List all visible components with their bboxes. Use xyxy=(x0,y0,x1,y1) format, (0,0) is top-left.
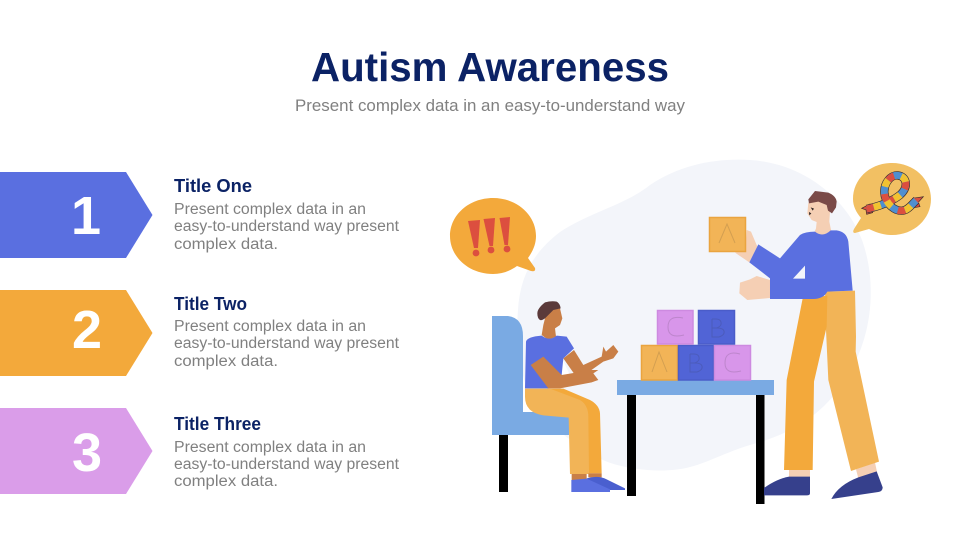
adult hair xyxy=(808,191,837,213)
adult hands xyxy=(735,230,770,300)
arrow: number two banner xyxy=(0,290,152,376)
number two: 2 xyxy=(72,300,102,360)
heading: title three: Title Three xyxy=(174,414,261,434)
panel: item one xyxy=(0,172,400,258)
gap between child's arms xyxy=(562,358,571,377)
background blob xyxy=(517,160,871,471)
child neck and face xyxy=(542,308,562,340)
speech bubble: exclamation marks xyxy=(450,198,536,274)
adult back leg xyxy=(825,291,879,471)
child shoes xyxy=(587,477,625,490)
text block: item two description: Present complex data in an xyxy=(174,318,366,335)
text block: item one description xyxy=(174,201,400,253)
adult arm gap xyxy=(793,266,805,279)
heading: title two: Title Two xyxy=(174,294,247,314)
adult shoes xyxy=(764,477,810,495)
block: held A xyxy=(710,218,746,252)
child shirt xyxy=(525,336,574,388)
text block: item three description: easy-to-understand way present xyxy=(174,456,400,473)
panel: item two xyxy=(0,290,400,376)
child trousers xyxy=(547,389,602,473)
child back arm xyxy=(563,345,618,375)
illustration: child and adult stacking blocks xyxy=(450,160,931,504)
adult head and neck xyxy=(807,200,831,235)
text block: item two description xyxy=(174,318,400,370)
block: lower C xyxy=(714,346,750,380)
adult shirt xyxy=(749,230,853,299)
block: upper B xyxy=(698,310,734,344)
number three: 3 xyxy=(72,423,102,483)
adult ankles xyxy=(789,463,877,478)
arrow: number one banner xyxy=(0,172,152,258)
text block: item three description xyxy=(174,439,400,490)
text block: item two description: easy-to-understand way present xyxy=(174,335,400,352)
child ankles xyxy=(572,473,602,480)
block: lower B xyxy=(678,346,714,380)
block: lower A xyxy=(642,346,678,380)
panel: item three xyxy=(0,408,400,494)
text block: item three description: Present complex data in an xyxy=(174,439,366,456)
subtitle: Present complex data in an easy-to-understand way xyxy=(295,97,686,115)
text block: item two description: complex data. xyxy=(174,353,278,370)
text block: item one description: easy-to-understand way present xyxy=(174,218,400,235)
adult front leg xyxy=(784,296,827,470)
figure: adult xyxy=(735,191,883,499)
speech bubble: puzzle ribbon xyxy=(853,163,931,235)
child hair xyxy=(537,301,561,320)
child front arm xyxy=(531,357,598,388)
number one: 1 xyxy=(71,186,101,246)
heading: title one: Title One xyxy=(174,176,252,196)
table xyxy=(617,380,774,504)
text block: item three description: complex data. xyxy=(174,473,278,490)
text block: item one description: complex data. xyxy=(174,236,278,253)
adult facial details xyxy=(809,207,814,215)
arrow: number three banner xyxy=(0,408,152,494)
chair xyxy=(492,316,569,492)
block: upper C xyxy=(658,310,693,344)
title: Autism Awareness xyxy=(311,44,669,90)
text block: item one description: Present complex data in an xyxy=(174,201,366,218)
icon: awareness ribbon xyxy=(862,175,923,214)
blocks stack xyxy=(642,310,750,380)
figure: child xyxy=(525,301,625,492)
